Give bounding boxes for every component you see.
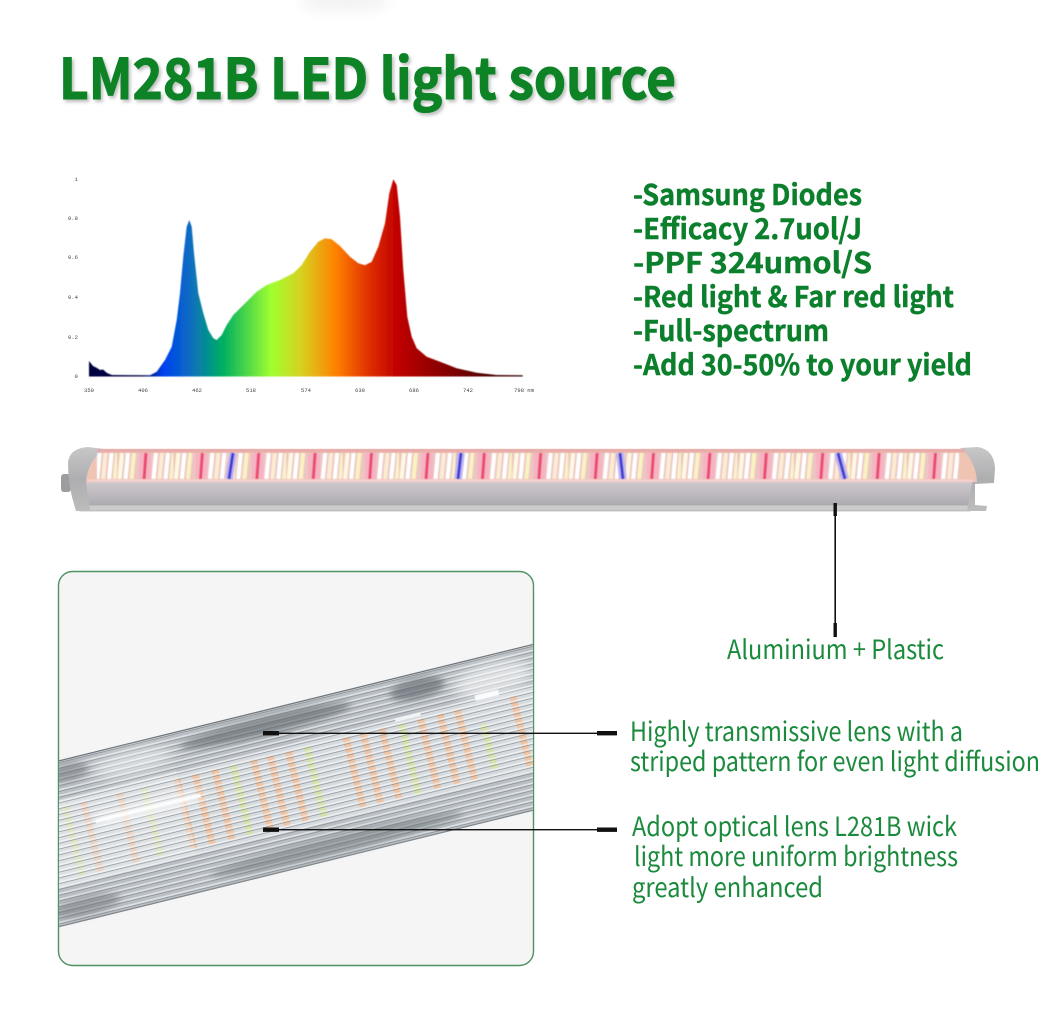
x axis labels: 462 — [192, 387, 202, 394]
x axis labels: 406 — [138, 387, 148, 394]
LED bar lamp — [61, 447, 995, 511]
callout line: optical lens — [263, 828, 617, 832]
panel background — [58, 572, 534, 966]
feature list: -Efficacy 2.7uol/J — [633, 207, 862, 248]
y axis labels: 0 — [74, 373, 78, 380]
text: optical lens description: Adopt optical lens L281B wick — [632, 805, 957, 844]
text: lens stripes description — [630, 710, 1040, 779]
feature list: -Full-spectrum — [633, 309, 829, 350]
title: LM281B LED light source — [59, 35, 676, 116]
feature list — [633, 173, 972, 384]
text: optical lens description — [632, 805, 958, 905]
feature list: -PPF 324umol/S — [633, 241, 872, 282]
x axis labels: 574 — [301, 387, 312, 394]
feature list: -Red light & Far red light — [633, 275, 954, 316]
left end cap — [68, 447, 104, 511]
text: lens stripes description: Highly transmissive lens with a — [630, 710, 963, 749]
lamp body — [85, 480, 975, 505]
x axis labels: 798 nm — [514, 387, 535, 394]
x axis labels: 350 — [84, 387, 94, 394]
y axis labels: 1 — [74, 176, 78, 183]
x axis labels: 686 — [409, 387, 419, 394]
feature list: -Samsung Diodes — [633, 173, 862, 214]
connector — [61, 474, 71, 492]
x axis labels: 742 — [463, 387, 473, 394]
callout line: lamp housing — [834, 503, 837, 637]
label: housing material: Aluminium + Plastic — [727, 628, 944, 667]
x axis labels — [84, 387, 535, 394]
feature list: -Add 30-50% to your yield — [633, 343, 972, 384]
text: optical lens description: light more uniform brightness — [634, 835, 958, 874]
LED strips — [88, 449, 973, 482]
x axis labels: 518 — [246, 387, 256, 394]
y axis labels: 0.6 — [68, 254, 78, 261]
spectrum curve — [89, 179, 523, 376]
y axis labels: 0.2 — [68, 334, 78, 341]
chart: light spectrum — [68, 176, 535, 394]
y axis labels: 0.8 — [68, 215, 78, 222]
lens window — [86, 449, 977, 482]
callout line: lens stripes — [263, 731, 617, 735]
y axis labels — [68, 176, 79, 380]
bottom rail — [80, 505, 970, 511]
y axis labels: 0.4 — [68, 294, 79, 301]
right end cap — [960, 447, 995, 511]
text: optical lens description: greatly enhanced — [632, 866, 823, 905]
background smudge — [300, 0, 390, 12]
panel: lens close-up — [58, 570, 534, 966]
lens photo band — [59, 644, 533, 928]
x axis labels: 630 — [355, 387, 365, 394]
